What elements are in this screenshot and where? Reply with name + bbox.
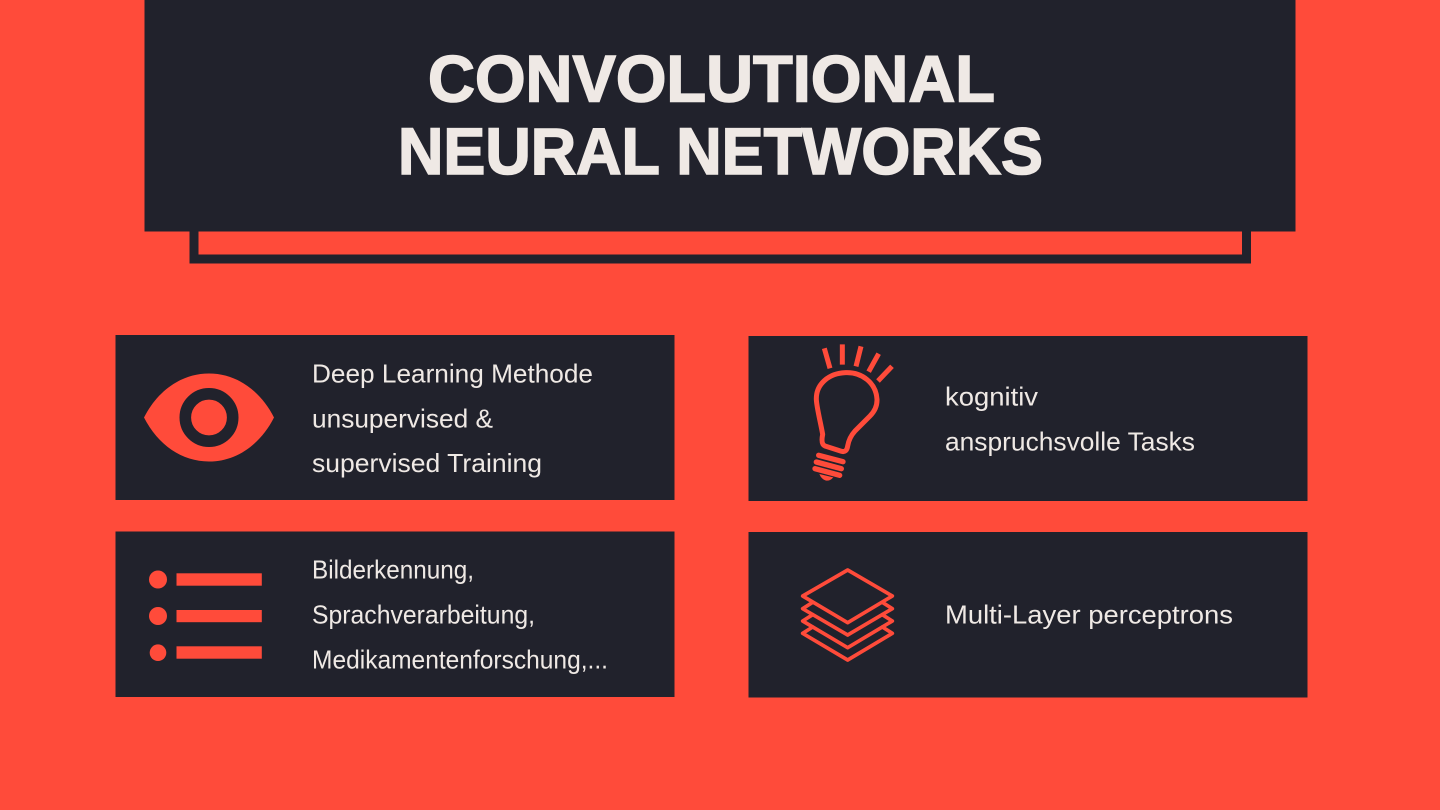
- text: cognitive tasks: anspruchsvolle Tasks: [945, 426, 1195, 456]
- panel: applications: [116, 532, 674, 697]
- icon: eye: [144, 374, 274, 462]
- panel: multi-layer perceptrons: [748, 532, 1308, 698]
- text: method description: supervised Training: [312, 448, 542, 478]
- header frame outline: [194, 225, 1246, 259]
- text: cognitive tasks: [945, 382, 1195, 456]
- text: method description: [312, 358, 593, 478]
- text: applications list: Bilderkennung,: [312, 554, 474, 584]
- text: method description: unsupervised &: [312, 404, 493, 434]
- text: applications list: Sprachverarbeitung,: [312, 600, 535, 630]
- icon: stacked layers: [803, 570, 892, 660]
- title: NEURAL NETWORKS: [398, 114, 1043, 188]
- text: cognitive tasks: kognitiv: [945, 382, 1038, 412]
- text: applications list: Medikamentenforschung,...: [312, 644, 608, 674]
- icon: light bulb: [815, 344, 892, 481]
- title panel: [144, 0, 1296, 232]
- icon: list: [149, 570, 262, 661]
- panel: cognitive tasks: [748, 336, 1308, 501]
- text: multi-layer perceptrons: Multi-Layer perceptrons: [945, 600, 1233, 630]
- text: method description: Deep Learning Methode: [312, 358, 593, 388]
- panel: deep learning method: [116, 335, 674, 500]
- title: [398, 42, 1043, 188]
- text: applications list: [312, 554, 608, 674]
- title: CONVOLUTIONAL: [428, 42, 995, 116]
